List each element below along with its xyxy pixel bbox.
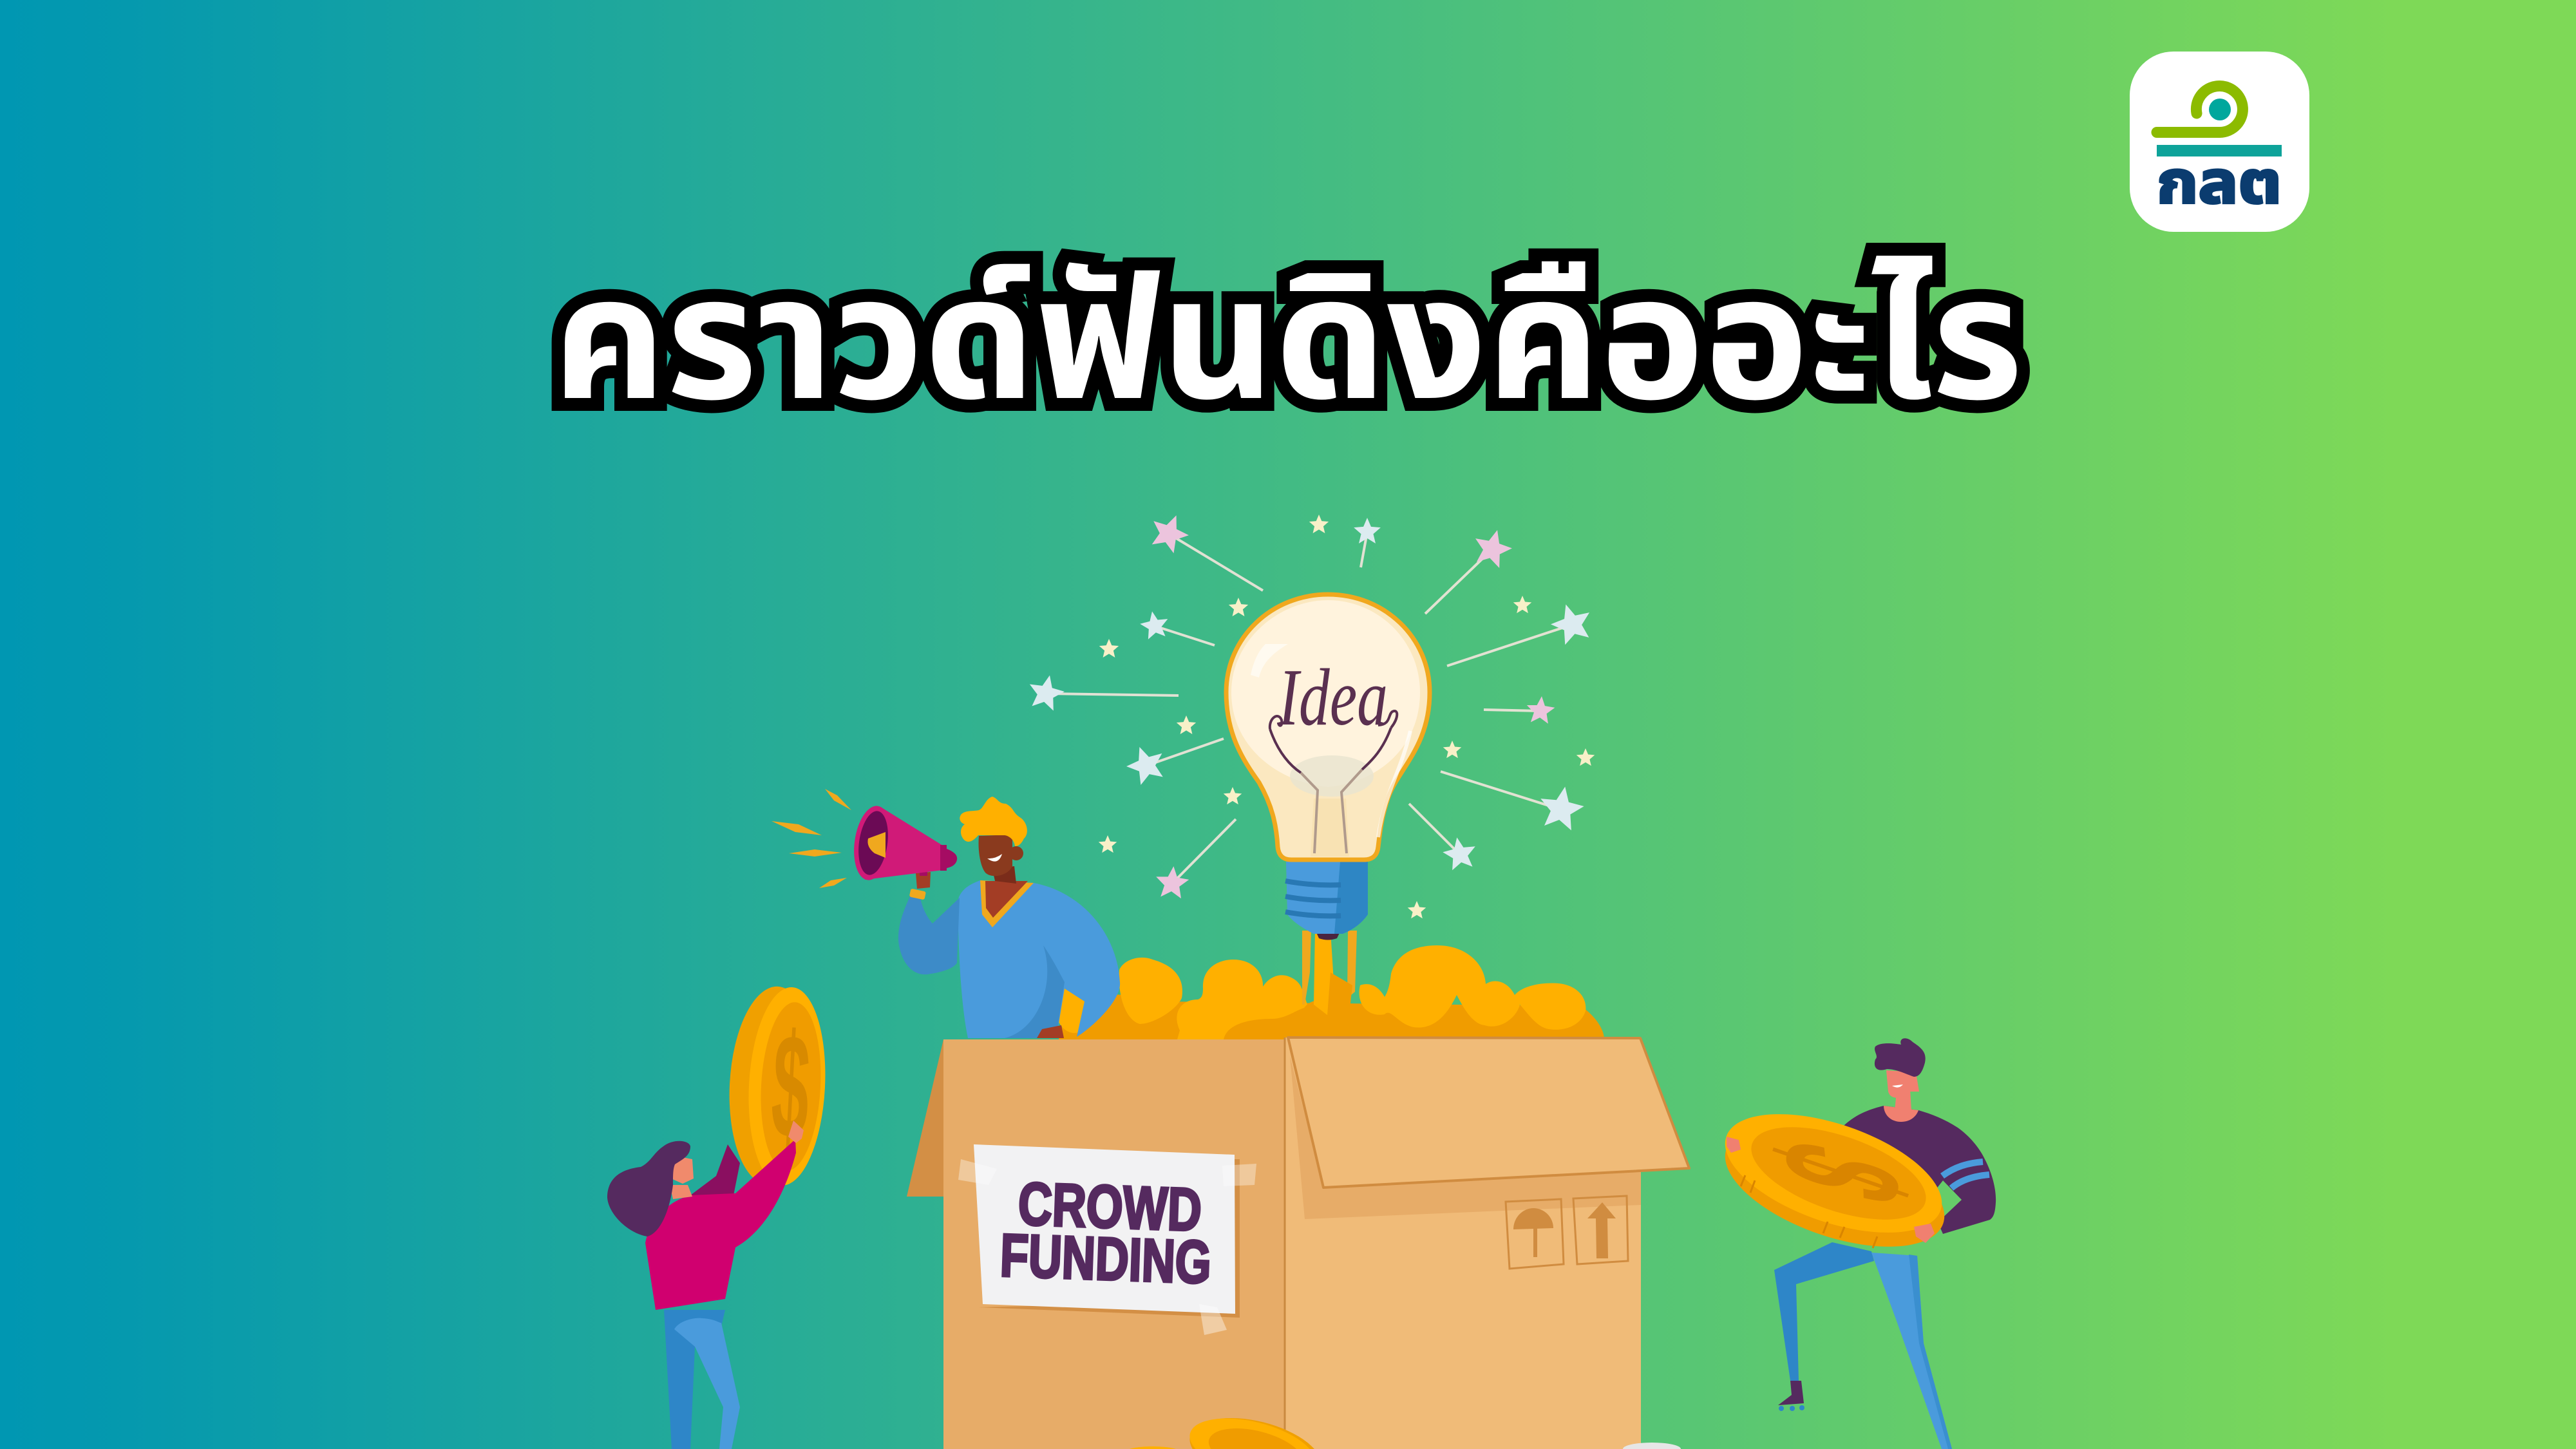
coin <box>724 984 830 1188</box>
woman with coin <box>607 984 830 1449</box>
jeans front leg <box>1871 1253 1952 1449</box>
back arm <box>690 1144 740 1195</box>
coin at foot of box <box>1124 1406 1329 1449</box>
box left face <box>943 1039 1285 1449</box>
sweater <box>958 880 1120 1038</box>
cardboard box <box>907 1037 1689 1449</box>
base shadow <box>1623 1443 1681 1449</box>
megaphone sound lines <box>772 789 851 888</box>
crowd funding label: CROWD <box>1017 1170 1203 1244</box>
hand <box>788 1121 804 1143</box>
big coin: $ <box>1744 1123 1942 1223</box>
back flap <box>907 1039 943 1197</box>
sleeve stripes <box>1942 1162 1989 1188</box>
megaphone <box>849 804 957 882</box>
hair <box>960 797 1027 846</box>
face and neck <box>670 1156 694 1199</box>
coin: $ <box>768 1003 813 1170</box>
crowd funding label <box>958 1144 1256 1335</box>
rocket flames under bulb <box>1302 931 1357 1024</box>
jeans <box>664 1310 740 1449</box>
crowd funding label: FUNDING <box>999 1221 1213 1296</box>
collar <box>980 880 1034 927</box>
flap shadow <box>1290 1056 1641 1219</box>
man carrying coin <box>1710 1038 1996 1449</box>
roller shoe <box>1778 1381 1804 1411</box>
hand and cuff <box>909 872 1064 1038</box>
raised arm <box>898 896 960 974</box>
logo: SEC Thailand: กลต <box>2157 150 2282 216</box>
handling icon: up arrow <box>1573 1196 1628 1264</box>
megaphone man <box>772 789 1120 1038</box>
filament wires <box>1270 711 1397 853</box>
big coin <box>1710 1090 1960 1271</box>
logo: SEC Thailand <box>2130 52 2309 232</box>
face and neck <box>1884 1070 1919 1122</box>
handling icon: umbrella <box>1506 1199 1564 1269</box>
box right face <box>1285 1037 1641 1449</box>
bulb screw base <box>1285 862 1368 940</box>
hands <box>1727 1137 1935 1243</box>
sweater <box>645 1139 796 1310</box>
smoke cloud from bulb launch <box>1055 945 1604 1039</box>
sweater <box>1842 1106 1996 1234</box>
filament word: Idea <box>1278 653 1388 743</box>
jeans back leg <box>1774 1242 1874 1381</box>
hair <box>1875 1038 1926 1077</box>
box top flap <box>1288 1037 1689 1188</box>
bulb glass <box>1226 594 1430 860</box>
face <box>978 835 1023 876</box>
light bulb <box>1226 594 1430 940</box>
light rays and stars <box>1021 507 1601 918</box>
title: คราวด์ฟันดิงคืออะไร <box>553 243 2023 435</box>
hair <box>607 1141 690 1236</box>
